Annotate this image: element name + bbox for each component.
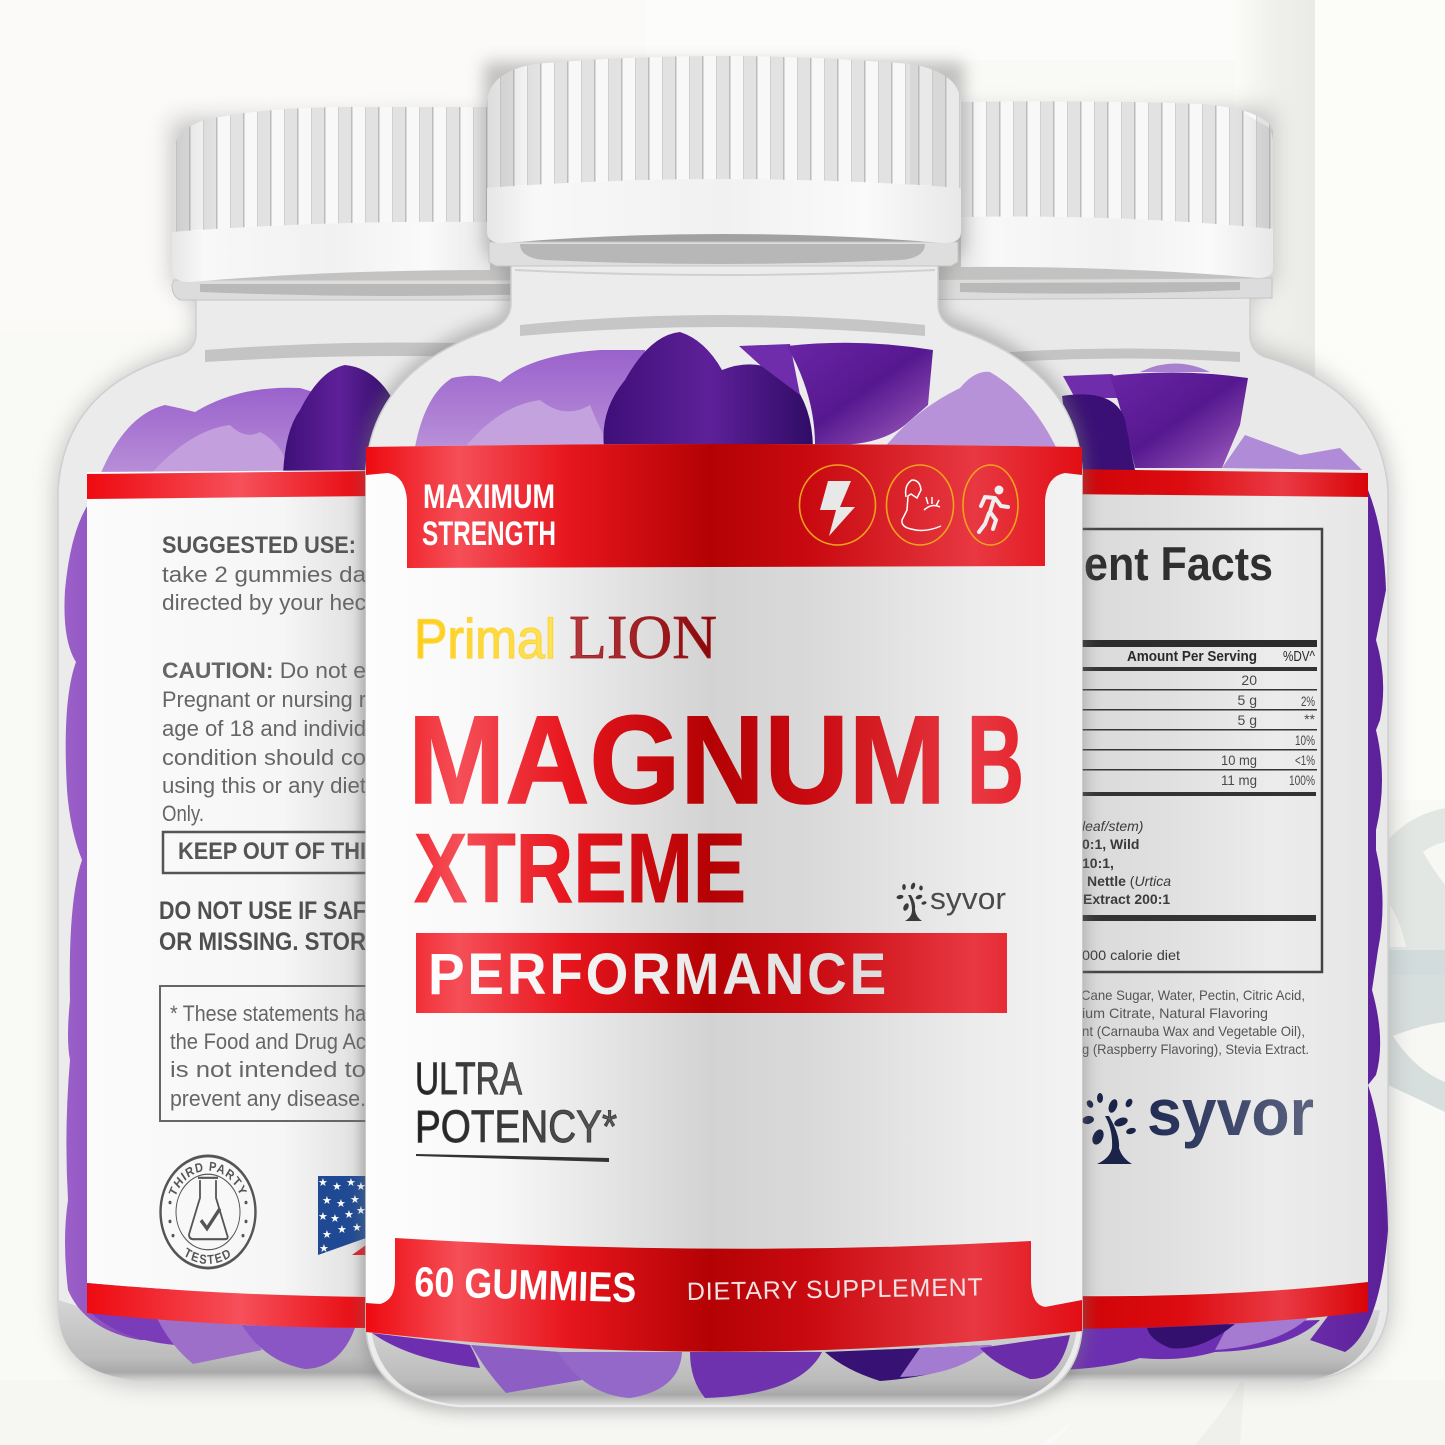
right bottle label bbox=[1060, 469, 1368, 1329]
left top gummy fold bbox=[150, 425, 290, 475]
syvor logo large: syvor bbox=[1147, 1075, 1314, 1149]
supplement facts box bbox=[1080, 529, 1322, 972]
other ingredients: Cane Sugar, Water, Pectin, Citric Acid, bbox=[1081, 987, 1305, 1003]
right bottle neck ring bbox=[828, 278, 1272, 300]
maximum strength: MAXIMUM bbox=[423, 478, 555, 516]
maximum strength bbox=[422, 478, 556, 553]
left label disclaimer box: is not intended to bbox=[170, 1057, 366, 1082]
icon: third party tested seal: THIRD PARTY bbox=[168, 1162, 247, 1194]
left bottle neck ring bbox=[172, 280, 614, 300]
center bottle glass bbox=[366, 262, 1082, 1408]
left label warning: DO NOT USE IF SAF bbox=[159, 897, 366, 925]
ingredient blend: Extract 200:1 bbox=[1083, 891, 1170, 907]
right shoulder rim bbox=[1010, 348, 1240, 362]
product name magnum b: MAGNUM bbox=[408, 691, 946, 830]
left label caution bbox=[162, 658, 366, 826]
left label suggested use: take 2 gummies da bbox=[162, 562, 367, 587]
right label bottom red band bbox=[1060, 1282, 1368, 1329]
center neck opening bbox=[520, 244, 925, 264]
center left gummy bbox=[415, 350, 650, 447]
icon: american flag: ★ bbox=[318, 1177, 328, 1189]
icon: american flag: ★ bbox=[332, 1181, 342, 1193]
left bottle bbox=[58, 107, 510, 1380]
left neck opening bbox=[200, 284, 600, 296]
icon: third party tested seal: TESTED bbox=[186, 1248, 230, 1264]
table top bar bbox=[1080, 640, 1317, 647]
table rows: 5 g bbox=[1238, 712, 1257, 728]
other ingredients bbox=[1081, 987, 1309, 1057]
left label suggested use bbox=[162, 532, 367, 615]
maximum strength: STRENGTH bbox=[422, 515, 556, 553]
icon: american flag: ★ bbox=[322, 1229, 332, 1241]
center right light gummy bbox=[885, 372, 1056, 447]
supplement facts title: ent Facts bbox=[1084, 537, 1273, 590]
center bottom gummy f bbox=[900, 1345, 992, 1377]
icon: american flag: ★ bbox=[356, 1181, 366, 1193]
dietary supplement: DIETARY SUPPLEMENT bbox=[687, 1273, 983, 1306]
brand primal lion: Primal bbox=[414, 607, 556, 670]
ingredient blend: 0:1, Wild bbox=[1082, 836, 1139, 852]
left label keep out box bbox=[163, 832, 366, 873]
other ingredients: ium Citrate, Natural Flavoring bbox=[1082, 1005, 1268, 1021]
left label bottom red band bbox=[87, 1283, 377, 1328]
left label caution: age of 18 and individ bbox=[162, 716, 366, 741]
center square gummy bbox=[739, 344, 800, 395]
60 gummies: 60 GUMMIES bbox=[414, 1258, 637, 1311]
icon: third party tested seal bbox=[159, 1154, 257, 1270]
center bottom glass bbox=[370, 1320, 1078, 1405]
ingredient blend: 000 calorie diet bbox=[1082, 947, 1180, 963]
center bottle cap bbox=[487, 56, 961, 243]
left bottle cap bbox=[172, 107, 490, 282]
performance banner bbox=[416, 933, 1007, 1013]
center bottom gummy c bbox=[558, 1352, 682, 1398]
left dark gummy bbox=[283, 365, 395, 475]
left label disclaimer box: the Food and Drug Ac bbox=[170, 1029, 366, 1054]
left label suggested use: directed by your hec bbox=[162, 590, 366, 615]
left label caution: Pregnant or nursing r bbox=[162, 687, 366, 712]
right side gummy column bbox=[1310, 490, 1388, 1352]
table rows: 11 mg bbox=[1221, 772, 1257, 788]
center bottom gummy d bbox=[690, 1352, 822, 1398]
other ingredients: nt (Carnauba Wax and Vegetable Oil), bbox=[1082, 1023, 1305, 1039]
left label caution: condition should co bbox=[162, 745, 366, 770]
icon: american flag: ★ bbox=[344, 1209, 354, 1221]
center bottle label bbox=[366, 444, 1082, 1352]
left bottle gummies bbox=[64, 365, 395, 1369]
table rows: 100% bbox=[1289, 772, 1315, 788]
ingredient blend bbox=[1082, 818, 1180, 963]
right label top red band bbox=[1060, 469, 1368, 497]
top red band bbox=[366, 444, 1082, 568]
left label caution: Only. bbox=[162, 801, 204, 826]
left label keep out box: KEEP OUT OF THI bbox=[178, 838, 366, 865]
left label disclaimer box bbox=[160, 986, 367, 1121]
icon: flexing muscle arm bbox=[886, 465, 954, 545]
product name magnum b: B bbox=[967, 691, 1024, 830]
table header rule bbox=[1080, 667, 1317, 671]
right bottle glass bbox=[850, 296, 1388, 1381]
right neck opening bbox=[960, 282, 1240, 294]
icon: american flag: ★ bbox=[337, 1224, 347, 1236]
syvor small logo: syvor bbox=[930, 881, 1006, 916]
left bottle glass bbox=[58, 296, 600, 1380]
center neck line bbox=[515, 270, 935, 275]
left top gummy bbox=[100, 388, 340, 475]
left bottom gummy a bbox=[90, 1312, 175, 1345]
right bottle bbox=[828, 101, 1388, 1382]
syvor small logo bbox=[896, 881, 1006, 921]
icon: american flag: ★ bbox=[318, 1211, 328, 1223]
left side gummy column bbox=[64, 490, 170, 1340]
right small gummy bbox=[1140, 364, 1210, 372]
ingredient blend: Nettle (Urtica bbox=[1087, 873, 1171, 889]
center neck ring bbox=[489, 242, 958, 266]
bottom red band bbox=[366, 1238, 1082, 1352]
center bottom gummy g bbox=[980, 1335, 1070, 1379]
table rows: 20 bbox=[1241, 672, 1257, 688]
table header: %DV^ bbox=[1283, 648, 1315, 665]
table rows: 5 g bbox=[1238, 692, 1257, 708]
left label disclaimer box: * These statements ha bbox=[170, 1001, 367, 1026]
right dome gummy bbox=[1110, 372, 1248, 468]
icon: american flag bbox=[318, 1176, 366, 1255]
left bottom gummy c bbox=[242, 1325, 355, 1369]
left bottle label bbox=[87, 470, 367, 1328]
table rows: 10 mg bbox=[1221, 752, 1257, 768]
right bottom dark gummy bbox=[1147, 1324, 1235, 1348]
table header: Amount Per Serving bbox=[1127, 648, 1257, 665]
left shoulder rim bbox=[205, 342, 600, 362]
center bottle shadow bbox=[362, 62, 1086, 1412]
center bottle bbox=[366, 56, 1082, 1408]
table rows: 10% bbox=[1295, 732, 1315, 748]
ingredient blend: leaf/stem) bbox=[1082, 818, 1143, 834]
center bottom gummy e bbox=[825, 1345, 992, 1381]
left label top red band bbox=[87, 471, 377, 499]
icon: american flag: ★ bbox=[330, 1213, 340, 1225]
brand primal lion: LION bbox=[569, 604, 717, 672]
center dome gummy bbox=[787, 343, 933, 445]
left label warning: OR MISSING. STOR bbox=[159, 928, 366, 956]
icon: american flag: ★ bbox=[336, 1198, 346, 1210]
table rows: <1% bbox=[1295, 752, 1315, 768]
table rows: 2% bbox=[1301, 693, 1315, 709]
left label caution: CAUTION: Do not e bbox=[162, 658, 366, 683]
right dark gummy bbox=[1062, 394, 1135, 470]
icon: american flag: ★ bbox=[350, 1194, 360, 1206]
icon: lightning bolt bbox=[800, 465, 876, 545]
center shoulder rim bbox=[520, 315, 925, 336]
left bottom gummy b bbox=[157, 1318, 262, 1364]
left label caution: using this or any diet bbox=[162, 773, 366, 798]
icon: american flag: ★ bbox=[356, 1205, 366, 1217]
ultra potency: ULTRA bbox=[415, 1053, 522, 1104]
left label warning bbox=[159, 897, 366, 956]
syvor logo large bbox=[1081, 1075, 1314, 1164]
ultra potency bbox=[415, 1053, 617, 1162]
right bottle cap bbox=[961, 101, 1273, 278]
right bottom gummies bbox=[1060, 1320, 1320, 1370]
ultra potency: POTENCY* bbox=[415, 1101, 617, 1152]
center bottom gummy a bbox=[372, 1333, 480, 1368]
left bottle bottom glass bbox=[58, 1300, 500, 1382]
icon: american flag: ★ bbox=[346, 1177, 356, 1189]
icon: running person bbox=[963, 465, 1018, 545]
table rows: ** bbox=[1304, 711, 1316, 727]
icon: american flag: ★ bbox=[319, 1243, 329, 1255]
right bottle bottom glass bbox=[1040, 1310, 1380, 1382]
right light gummy bbox=[1222, 435, 1362, 470]
center bottle gummies bbox=[372, 332, 1070, 1398]
right bottom light gummy bbox=[1215, 1316, 1310, 1350]
center dark gummy bbox=[603, 332, 813, 447]
left label disclaimer box: prevent any disease. bbox=[170, 1086, 366, 1111]
center left gummy fold bbox=[465, 400, 610, 447]
performance banner: PERFORMANCE bbox=[428, 942, 889, 1007]
product name xtreme: XTREME bbox=[414, 813, 746, 923]
other ingredients: g (Raspberry Flavoring), Stevia Extract. bbox=[1082, 1041, 1309, 1057]
icon: american flag: ★ bbox=[322, 1195, 332, 1207]
brand primal lion bbox=[414, 604, 717, 672]
right square gummy bbox=[1063, 374, 1140, 398]
icon: american flag: ★ bbox=[352, 1222, 362, 1234]
center bottom gummy b bbox=[471, 1345, 582, 1393]
table rows bbox=[1221, 672, 1316, 788]
left label suggested use: SUGGESTED USE: bbox=[162, 532, 356, 559]
ingredient blend: 10:1, bbox=[1082, 855, 1114, 871]
right bottle gummies bbox=[1060, 364, 1388, 1370]
